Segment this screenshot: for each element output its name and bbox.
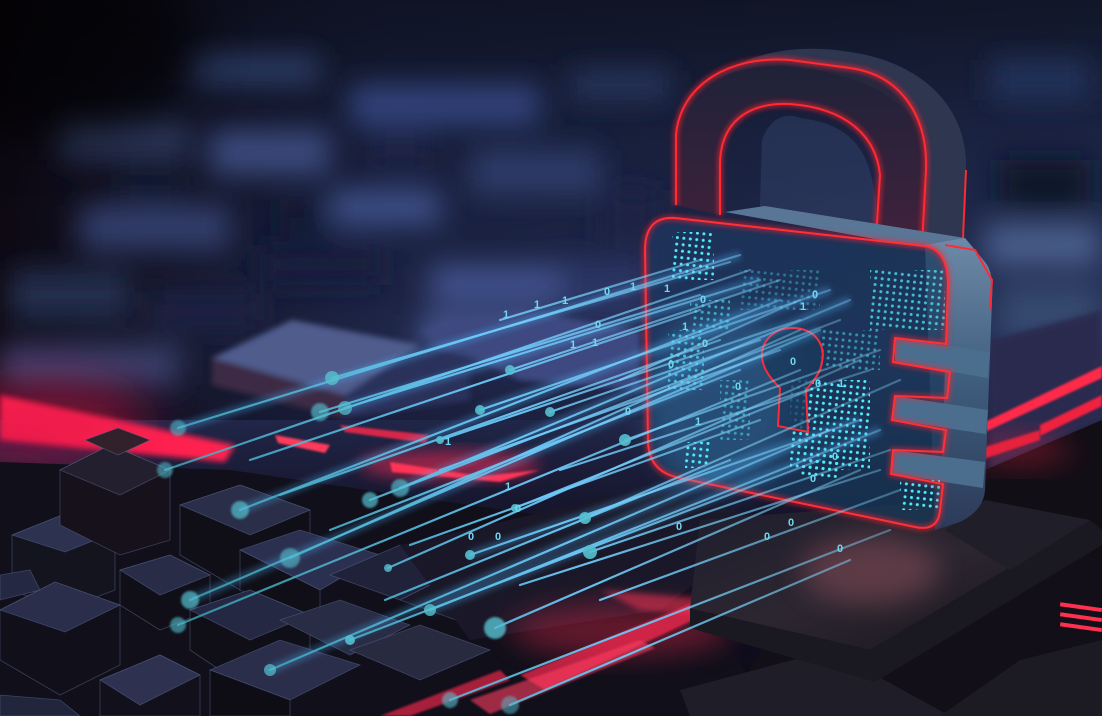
lower right board [680, 500, 1102, 716]
data streams: soft beam glow [178, 255, 880, 670]
binary digits: 1 [534, 299, 540, 311]
red glow: centre board traces [275, 425, 540, 482]
binary digits: 1 [682, 321, 688, 333]
lock face outline with notches [645, 218, 950, 528]
binary digits: 1 [800, 301, 806, 313]
haze from beams [645, 305, 795, 495]
binary digits: 1 [505, 481, 511, 493]
binary digits: 0 [790, 356, 796, 368]
binary digits: 0 [604, 286, 610, 298]
shackle [676, 59, 926, 246]
binary digits: 0 [515, 503, 521, 515]
dotted data matrix [668, 232, 945, 510]
binary digits: 1 [838, 378, 844, 390]
binary digits: 0 [788, 517, 794, 529]
binary digits: 1 [503, 309, 509, 321]
binary digits: 0 [837, 543, 843, 555]
binary digits: 1 [695, 416, 701, 428]
lock pedestal [690, 500, 1102, 682]
binary digits: 0 [812, 289, 818, 301]
blurred city of circuit blocks [0, 55, 1100, 385]
lock body side [925, 238, 992, 530]
binary digits: 0 [468, 531, 474, 543]
data streams: nodes [157, 365, 631, 714]
binary digits: 0 [764, 531, 770, 543]
binary digits: 0 [810, 473, 816, 485]
binary digits: 0 [495, 531, 501, 543]
binary digits: 0 [815, 378, 821, 390]
binary digits: 1 [592, 337, 598, 349]
binary digits: 1 [570, 339, 576, 351]
corner darkening [0, 0, 200, 140]
lower board surface [0, 462, 780, 716]
binary digits [445, 281, 844, 555]
red glow: right side traces [960, 310, 1102, 560]
chips on circuit board, lower left [0, 428, 540, 716]
lock body face [645, 218, 948, 528]
red glow: left band [0, 380, 235, 550]
red glow: lower centre traces [380, 590, 730, 716]
padlock [645, 49, 992, 530]
blurred chip, middle [212, 310, 640, 418]
binary digits: 0 [832, 451, 838, 463]
binary digits: 1 [562, 295, 568, 307]
binary digits: 1 [664, 283, 670, 295]
binary digits: 0 [700, 294, 706, 306]
binary digits: 0 [676, 521, 682, 533]
binary digits: 0 [735, 381, 741, 393]
binary digits: 1 [630, 281, 636, 293]
board plate under lock [400, 490, 780, 640]
data streams: light beams into the lock [165, 255, 900, 705]
binary digits: 0 [702, 338, 708, 350]
keyhole [762, 328, 823, 432]
binary digits: 0 [668, 359, 674, 371]
side notch blocks [895, 338, 990, 378]
shackle glow outline [676, 59, 926, 246]
shackle back depth [700, 49, 966, 245]
binary digits: 0 [625, 406, 631, 418]
binary digits: 1 [445, 436, 451, 448]
binary digits: 0 [595, 319, 601, 331]
